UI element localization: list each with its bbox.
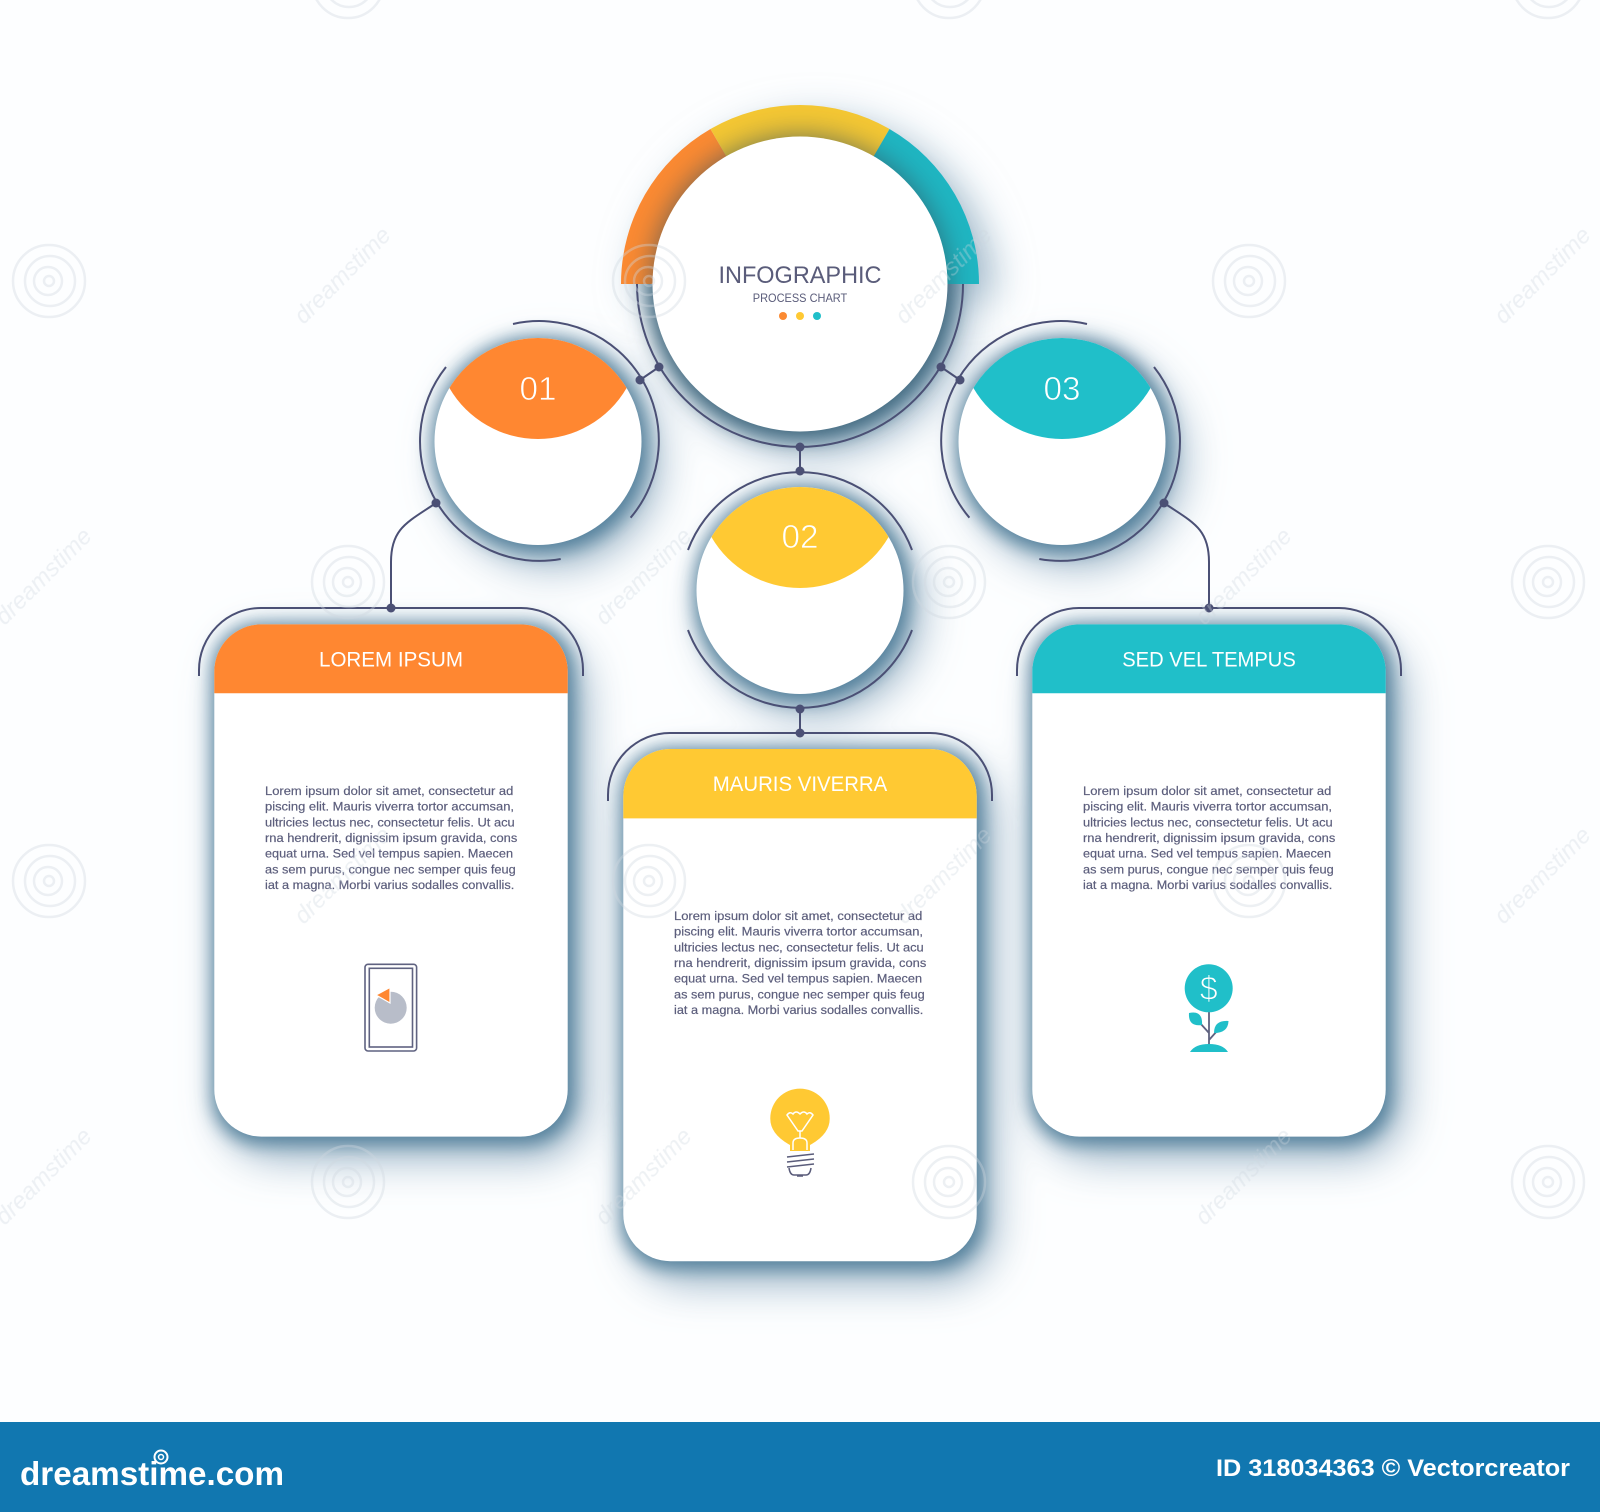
card 2 outline <box>608 733 992 801</box>
card 2 heading: MAURIS VIVERRA <box>713 773 887 796</box>
number 01: 01 <box>520 370 556 407</box>
cap 01 <box>449 338 627 439</box>
arc segment: orange <box>621 129 730 284</box>
ring 02 <box>688 472 912 708</box>
icon: money plant <box>1185 964 1233 1052</box>
card 3 text: iat a magna. Morbi varius sodalles convallis. <box>1083 878 1332 892</box>
central outline ring <box>637 284 963 447</box>
card 2 text: ultricies lectus nec, consectetur felis. Ut acu <box>674 940 924 954</box>
card 2 text <box>674 909 926 1017</box>
icon: light bulb <box>770 1089 830 1176</box>
central circle with coloured arc <box>621 105 979 447</box>
card 1 text: piscing elit. Mauris viverra tortor accumsan, <box>265 800 514 814</box>
card 1 text: equat urna. Sed vel tempus sapien. Maecen <box>265 847 513 861</box>
card 1 text <box>265 784 517 892</box>
footer bar <box>0 1422 1600 1512</box>
card 3 text: Lorem ipsum dolor sit amet, consectetur ad <box>1083 784 1331 798</box>
panel: card 3 <box>1017 608 1401 1137</box>
text: dreamstime <box>890 822 998 930</box>
card 3 outline <box>1017 608 1401 676</box>
ring 03 <box>941 321 1180 561</box>
connector: 02 to card 2 <box>796 704 804 738</box>
central white circle <box>652 136 948 432</box>
connectors from central circle <box>636 362 964 476</box>
card 3 body <box>1032 624 1386 1137</box>
number 02: 02 <box>782 518 818 555</box>
card 3 heading: SED VEL TEMPUS <box>1122 648 1296 672</box>
ring 01 <box>420 321 659 561</box>
connector: 03 to card 3 <box>1160 498 1214 612</box>
panel: card 2 <box>608 733 992 1261</box>
step 01 circle <box>420 321 659 561</box>
card 3 header <box>1032 624 1386 693</box>
icon: phone with pie chart <box>365 964 417 1051</box>
arc segment: teal <box>870 129 979 284</box>
step 03 circle <box>941 321 1180 561</box>
cap 03 <box>973 338 1151 439</box>
text: dreamstime <box>590 1123 698 1231</box>
card 3 text: rna hendrerit, dignissim ipsum gravida, cons <box>1083 831 1335 845</box>
title: INFOGRAPHIC <box>718 262 882 289</box>
card 1 text: Lorem ipsum dolor sit amet, consectetur ad <box>265 784 513 798</box>
card 1 text: iat a magna. Morbi varius sodalles convallis. <box>265 878 514 892</box>
card 2 text: piscing elit. Mauris viverra tortor accumsan, <box>674 925 923 939</box>
number 03: 03 <box>1044 370 1080 407</box>
card 1 text: as sem purus, congue nec semper quis feug <box>265 862 516 876</box>
card 1 outline <box>199 608 583 676</box>
card 3 text: as sem purus, congue nec semper quis feug <box>1083 862 1334 876</box>
text: dreamstime <box>590 523 698 631</box>
card 2 header <box>623 749 977 818</box>
text: dreamstime <box>1489 822 1597 930</box>
text: dreamstime <box>1190 1123 1298 1231</box>
card 1 header <box>214 624 568 693</box>
card 2 text: iat a magna. Morbi varius sodalles convallis. <box>674 1003 923 1017</box>
icon: money plant: $ <box>1200 970 1218 1008</box>
connector: 01 to card 1 <box>386 498 440 612</box>
card 3 text: equat urna. Sed vel tempus sapien. Maecen <box>1083 847 1331 861</box>
footer credit: ID 318034363 © Vectorcreator <box>1216 1455 1570 1482</box>
text: dreamstime <box>289 222 397 330</box>
card 3 text <box>1083 784 1335 892</box>
card 3 text: ultricies lectus nec, consectetur felis. Ut acu <box>1083 815 1333 829</box>
card 2 text: rna hendrerit, dignissim ipsum gravida, cons <box>674 956 926 970</box>
subtitle: PROCESS CHART <box>753 291 848 305</box>
text: dreamstime <box>1190 523 1298 631</box>
three colour dots <box>779 312 821 320</box>
card 2 text: as sem purus, congue nec semper quis feug <box>674 987 925 1001</box>
text: dreamstime <box>289 822 397 930</box>
card 1 heading: LOREM IPSUM <box>319 648 463 672</box>
arc segment: yellow <box>710 105 890 163</box>
card 2 text: equat urna. Sed vel tempus sapien. Maecen <box>674 972 922 986</box>
card 2 body <box>623 749 977 1261</box>
text: dreamstime <box>1489 222 1597 330</box>
footer logo: dreamstime.com <box>20 1455 284 1492</box>
card 1 body <box>214 624 568 1137</box>
step 02 circle <box>688 472 912 708</box>
card 2 text: Lorem ipsum dolor sit amet, consectetur ad <box>674 909 922 923</box>
cap 02 <box>711 487 889 588</box>
panel: card 1 <box>199 608 583 1137</box>
card 1 text: rna hendrerit, dignissim ipsum gravida, cons <box>265 831 517 845</box>
card 3 text: piscing elit. Mauris viverra tortor accumsan, <box>1083 800 1332 814</box>
text: dreamstime <box>890 222 998 330</box>
card 1 text: ultricies lectus nec, consectetur felis. Ut acu <box>265 815 515 829</box>
